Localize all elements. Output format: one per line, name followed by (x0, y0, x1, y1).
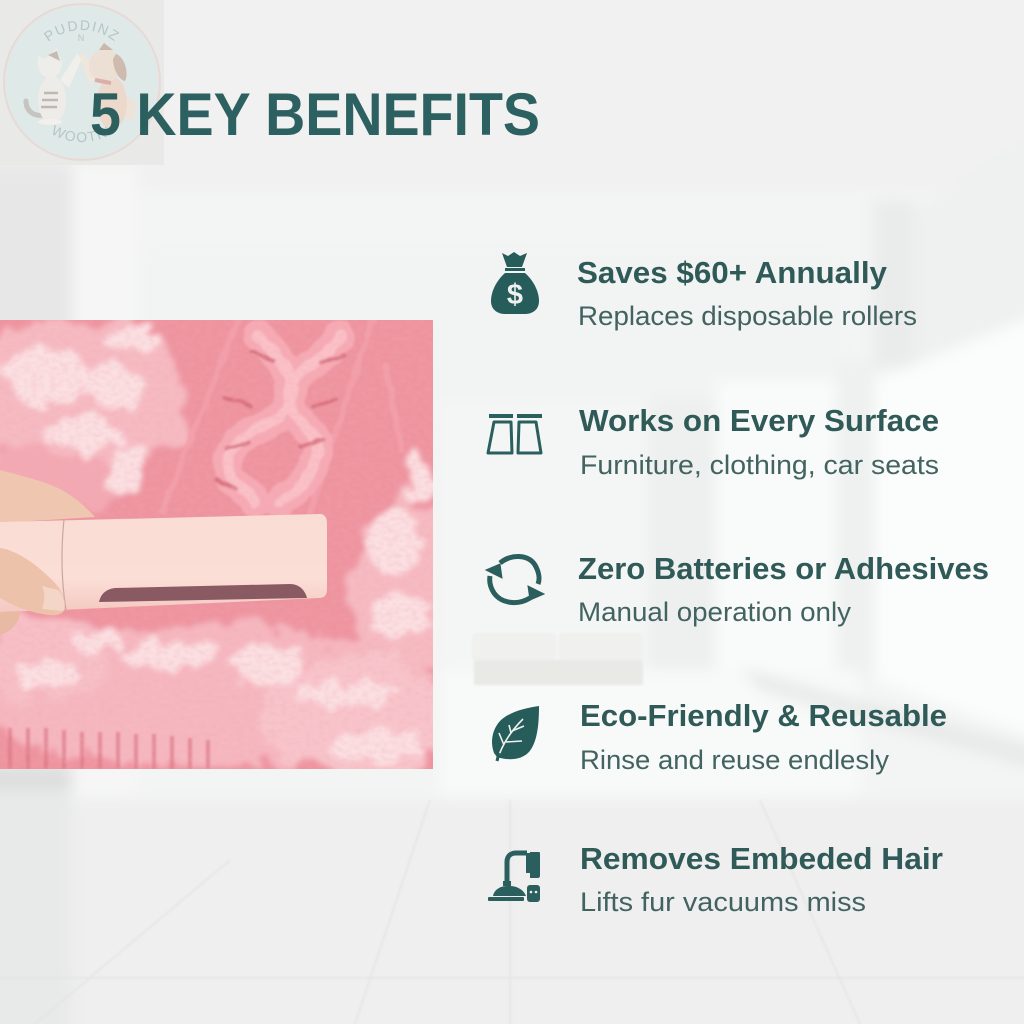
upper finger (0, 470, 95, 523)
logo text (44, 20, 120, 142)
heading: Zero Batteries or Adhesives (578, 551, 989, 586)
benefit row 3: zero batteries (486, 551, 989, 627)
heading: Removes Embeded Hair (580, 841, 943, 876)
description: Furniture, clothing, car seats (580, 450, 939, 480)
icon: money bag (491, 252, 539, 314)
icon: seats (488, 416, 542, 453)
icon: money bag: $ (507, 279, 523, 311)
benefit row 2: every surface (488, 403, 939, 480)
logo text: WOOTKI (53, 125, 111, 142)
heading: Works on Every Surface (579, 403, 939, 438)
cable knit braid (162, 320, 402, 512)
lint roller body (0, 514, 327, 612)
heading: Eco-Friendly & Reusable (580, 698, 947, 733)
title: 5 KEY BENEFITS (90, 81, 540, 148)
ribbed hem (10, 728, 208, 769)
thumb nail (42, 586, 64, 611)
background sofa (472, 633, 643, 685)
sweater fluff patches (0, 320, 460, 775)
knit texture overlay (0, 320, 433, 769)
icon: vacuum (488, 852, 540, 902)
benefit row 1: saves money (491, 252, 917, 331)
lower finger (0, 610, 20, 635)
icon: cat (26, 48, 82, 125)
icon: dog (79, 43, 136, 129)
roller brush pad (99, 584, 307, 602)
description: Replaces disposable rollers (578, 301, 917, 331)
benefit row 5: removes hair (488, 841, 943, 917)
description: Manual operation only (578, 597, 852, 627)
description: Rinse and reuse endlesly (580, 745, 890, 775)
description: Lifts fur vacuums miss (580, 887, 866, 917)
photo: pink sweater with lint roller (0, 320, 460, 775)
benefit row 4: eco-friendly (492, 698, 947, 775)
logo text: N (78, 33, 84, 43)
logo text: PUDDINZ (44, 20, 120, 42)
thumb (0, 548, 65, 615)
icon: recycle arrows (486, 556, 544, 603)
watermark logo: Puddinz N Wootki (0, 0, 164, 165)
icon: leaf (492, 706, 539, 761)
heading: Saves $60+ Annually (577, 255, 888, 290)
